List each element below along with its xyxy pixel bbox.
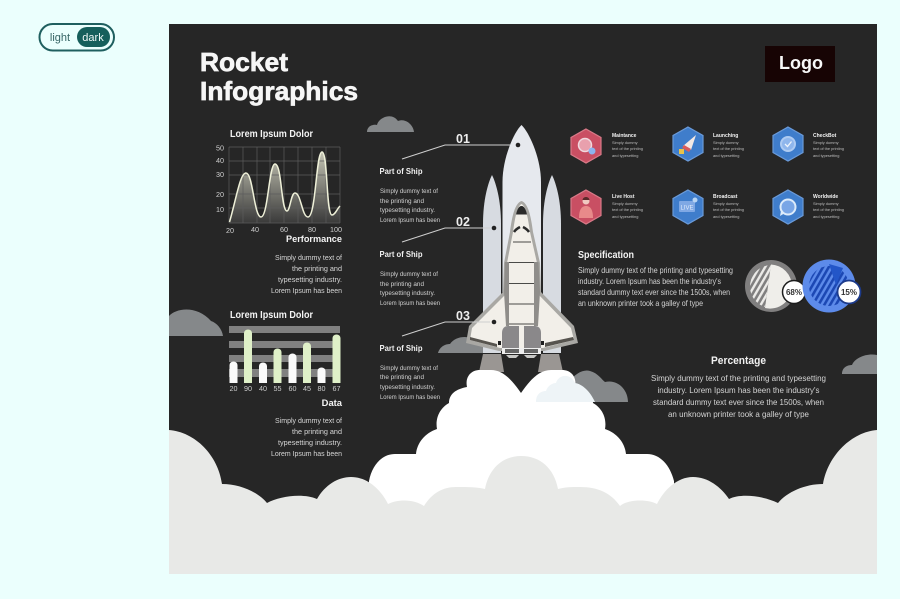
- caption: checklist: and typesetting: [813, 153, 839, 158]
- light/dark toggle: dark: [82, 32, 104, 44]
- performance text block: Performance: [286, 233, 342, 244]
- bar chart: 45: [303, 384, 311, 393]
- bar chart: 80: [318, 384, 326, 393]
- bar chart: [229, 326, 340, 393]
- caption: live host: [612, 194, 643, 219]
- title: Rocket: [200, 47, 288, 77]
- caption: broadcast: Broadcast: [713, 194, 738, 200]
- bar chart: 55: [274, 384, 282, 393]
- left booster: [483, 175, 501, 353]
- caption: maintance: Simply dummy: [612, 140, 638, 145]
- part of ship 01: Lorem Ipsum has been: [380, 217, 440, 224]
- engine base: [502, 348, 541, 354]
- percentage text: standard dummy text ever since the 1500s, when: [653, 397, 824, 407]
- caption: broadcast: text of the printing: [713, 207, 744, 212]
- part of ship 01: 01: [456, 132, 470, 146]
- caption: broadcast: [713, 194, 744, 219]
- caption: launching: and typesetting: [713, 153, 739, 158]
- icon: launching: [673, 127, 703, 161]
- bar chart heading: Lorem Ipsum Dolor: [230, 310, 313, 321]
- donut chart 68%: 68%: [786, 288, 802, 297]
- line chart: 40: [216, 156, 224, 165]
- caption: broadcast: and typesetting: [713, 214, 739, 219]
- part of ship 03: typesetting industry.: [380, 384, 435, 391]
- caption: live host: text of the printing: [612, 207, 643, 212]
- part of ship 03: [380, 309, 470, 401]
- dark panel background: [169, 24, 877, 574]
- part of ship 01: Simply dummy text of: [380, 188, 438, 195]
- data text block: Simply dummy text of: [275, 416, 343, 425]
- caption: launching: Simply dummy: [713, 140, 739, 145]
- bar chart: 40: [259, 384, 267, 393]
- data text block: typesetting industry.: [278, 438, 342, 447]
- right booster: [543, 175, 561, 353]
- specification text: Specification: [578, 250, 634, 261]
- percentage text: industry. Lorem Ipsum has been the industry's: [658, 385, 820, 395]
- part of ship 03: Part of Ship: [380, 343, 422, 353]
- bar chart: 60: [288, 384, 296, 393]
- caption: worldwide: Simply dummy: [813, 201, 839, 206]
- caption: checklist: Simply dummy: [813, 140, 839, 145]
- performance text block: [271, 233, 343, 295]
- donut chart 68%: [745, 260, 806, 312]
- title: [200, 47, 358, 106]
- icon: worldwide: [773, 190, 803, 224]
- caption: maintance: [612, 133, 643, 158]
- engines: [502, 326, 541, 352]
- performance text block: the printing and: [292, 264, 342, 273]
- caption: launching: Launching: [713, 133, 738, 139]
- light/dark toggle: light: [50, 32, 70, 44]
- part of ship 03: the printing and: [380, 374, 424, 381]
- caption: live host: and typesetting: [612, 214, 638, 219]
- space shuttle rocket: [466, 125, 578, 358]
- caption: worldwide: Worldwide: [813, 194, 838, 200]
- line chart: 10: [216, 205, 224, 214]
- bar chart: 67: [332, 384, 340, 393]
- specification text: standard dummy text ever since the 1500s, when: [578, 287, 730, 297]
- specification text: [578, 250, 733, 308]
- line chart: 20: [216, 190, 224, 199]
- pale cloud over plume: [536, 376, 595, 402]
- light/dark toggle: [40, 24, 114, 50]
- wing stripes: [470, 337, 574, 347]
- percentage text: [651, 355, 826, 419]
- performance text block: Lorem Ipsum has been: [271, 286, 342, 295]
- icon: checklist: [773, 127, 803, 161]
- part of ship 01: the printing and: [380, 198, 424, 205]
- cloud: right of plume: [574, 370, 628, 402]
- line chart heading: Lorem Ipsum Dolor: [230, 129, 313, 140]
- data text block: Data: [322, 397, 343, 408]
- orbiter outline: [466, 201, 578, 351]
- main fuel tank: [502, 125, 541, 350]
- caption: checklist: text of the printing: [813, 146, 844, 151]
- line chart: 30: [216, 170, 224, 179]
- foreground grey clouds: [169, 430, 877, 574]
- white exhaust plume: [369, 370, 674, 520]
- cargo bay: [504, 242, 540, 326]
- caption: maintance: Maintance: [612, 133, 637, 139]
- line chart: 100: [330, 225, 342, 234]
- line chart: 40: [251, 225, 259, 234]
- feature icons: [571, 127, 803, 224]
- part of ship 01: [380, 132, 470, 224]
- performance text block: typesetting industry.: [278, 275, 342, 284]
- line chart: 60: [280, 225, 288, 234]
- data text block: the printing and: [292, 427, 342, 436]
- background clouds: [169, 116, 877, 402]
- part of ship 02: Lorem Ipsum has been: [380, 300, 440, 307]
- leader lines and markers: [402, 143, 520, 336]
- cloud: behind shuttle: [438, 337, 483, 353]
- specification text: Simply dummy text of the printing and typesetting: [578, 265, 733, 275]
- bar chart: 90: [244, 384, 252, 393]
- line chart: 20: [226, 226, 234, 235]
- caption: broadcast: Simply dummy: [713, 201, 739, 206]
- data text block: [271, 397, 343, 458]
- icon: broadcast: LIVE: [680, 206, 694, 212]
- caption: worldwide: text of the printing: [813, 207, 844, 212]
- performance text block: Simply dummy text of: [275, 253, 343, 262]
- caption: live host: Simply dummy: [612, 201, 638, 206]
- percentage text: Simply dummy text of the printing and typesetting: [651, 373, 826, 383]
- caption: maintance: and typesetting: [612, 153, 638, 158]
- part of ship 01: typesetting industry.: [380, 207, 435, 214]
- line chart: 50: [216, 144, 224, 152]
- icon: broadcast: [673, 190, 703, 224]
- cloud: left edge: [169, 309, 223, 336]
- cockpit window: [516, 206, 527, 214]
- caption: launching: text of the printing: [713, 146, 744, 151]
- icon captions: [612, 133, 844, 219]
- donut chart 15%: [802, 260, 860, 312]
- bar chart: 20: [230, 384, 238, 393]
- donut chart 15%: 15%: [841, 288, 857, 297]
- icon: maintenance: [571, 129, 601, 163]
- part of ship 01: Part of Ship: [380, 166, 422, 176]
- part of ship 03: 03: [456, 309, 470, 323]
- caption: maintance: text of the printing: [612, 146, 643, 151]
- caption: worldwide: [813, 194, 844, 219]
- part of ship 02: typesetting industry.: [380, 290, 435, 297]
- caption: worldwide: and typesetting: [813, 214, 839, 219]
- part of ship 02: the printing and: [380, 281, 424, 288]
- line chart: 80: [308, 225, 316, 234]
- data text block: Lorem Ipsum has been: [271, 449, 342, 458]
- caption: checklist: CheckBot: [813, 133, 837, 139]
- orbiter body: [470, 204, 574, 348]
- caption: launching: [713, 133, 744, 158]
- rocket nozzle exhaust stands: [479, 354, 563, 372]
- part of ship 02: Simply dummy text of: [380, 271, 438, 278]
- part of ship 03: Lorem Ipsum has been: [380, 394, 440, 401]
- part of ship 02: 02: [456, 215, 470, 229]
- percentage text: Percentage: [711, 355, 766, 367]
- logo: [765, 46, 835, 82]
- logo: Logo: [779, 53, 823, 73]
- caption: live host: Live Host: [612, 194, 635, 200]
- cloud: top centre: [367, 116, 414, 132]
- part of ship 02: [380, 215, 470, 307]
- percentage text: an unknown printer took a galley of type: [668, 409, 809, 419]
- specification text: industry. Lorem Ipsum has been the industry's: [578, 276, 721, 286]
- cloud: right edge: [842, 355, 877, 374]
- line chart: [216, 144, 342, 235]
- specification text: an unknown printer took a galley of type: [578, 298, 703, 308]
- icon: live host: [571, 190, 601, 224]
- part of ship 03: Simply dummy text of: [380, 365, 438, 372]
- title: Infographics: [200, 76, 358, 106]
- part of ship 02: Part of Ship: [380, 249, 422, 259]
- caption: checklist: [813, 133, 844, 158]
